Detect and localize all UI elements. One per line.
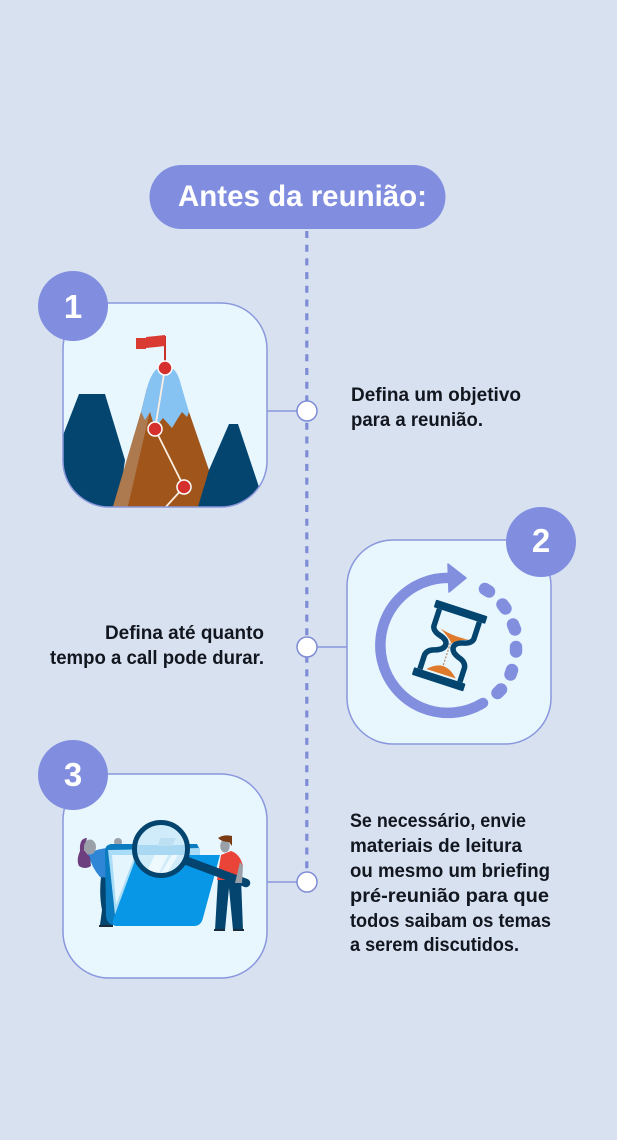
panel: step 1 mountain	[38, 271, 270, 510]
connector 2	[316, 646, 347, 648]
text: step 3	[350, 811, 551, 956]
connector 3	[267, 881, 298, 883]
text: step 3: todos saibam os temas	[350, 911, 551, 932]
badge 1: 1	[64, 288, 82, 325]
text: step 1: para a reunião.	[351, 410, 483, 431]
infographic	[38, 165, 576, 979]
icon: mountains	[60, 335, 270, 510]
timeline dashed line	[305, 231, 308, 874]
badge 3	[38, 740, 108, 810]
panel: step 2 hourglass	[347, 507, 576, 744]
badge 3: 3	[64, 756, 82, 793]
icon: folder	[105, 844, 220, 926]
panel: step 3 folder	[38, 740, 267, 978]
badge 2: 2	[532, 522, 550, 559]
text: step 3: a serem discutidos.	[350, 935, 519, 956]
timeline node 3	[297, 872, 317, 892]
connector 1	[267, 410, 298, 412]
icon: man	[214, 835, 244, 931]
icon: circular arrow	[380, 564, 516, 713]
badge 1	[38, 271, 108, 341]
timeline node 2	[297, 637, 317, 657]
timeline node 1	[297, 401, 317, 421]
icon: magnifier	[134, 822, 246, 883]
text: step 3: materiais de leitura	[350, 836, 522, 857]
title: Antes da reunião:	[178, 180, 427, 213]
text: step 2	[50, 623, 264, 669]
title pill	[150, 165, 446, 229]
text: step 3: Se necessário, envie	[350, 811, 526, 832]
text: step 2: Defina até quanto	[105, 623, 264, 644]
text: step 1: Defina um objetivo	[351, 385, 521, 406]
icon: woman	[78, 838, 122, 927]
icon: hourglass	[412, 600, 488, 691]
text: step 3: pré-reunião para que	[350, 886, 549, 907]
badge 2	[506, 507, 576, 577]
text: step 3: ou mesmo um briefing	[350, 861, 550, 882]
text: step 1	[351, 385, 521, 431]
text: step 2: tempo a call pode durar.	[50, 648, 264, 669]
